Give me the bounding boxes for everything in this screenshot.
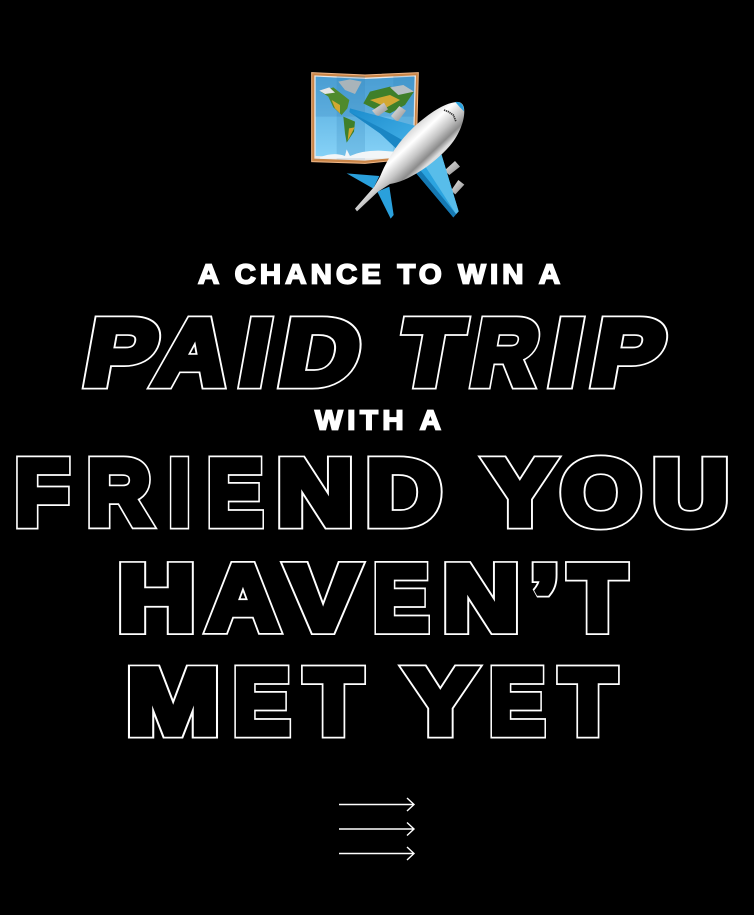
outlined heading: PAID TRIP: D [272, 300, 369, 404]
outlined heading: HAVEN'T [118, 546, 626, 650]
outlined heading: HAVEN'T: N [443, 546, 519, 650]
outlined heading: FRIEND YOU: N [277, 440, 353, 544]
icon: folded world map [312, 73, 418, 163]
outlined heading: HAVEN'T: H [118, 546, 195, 650]
outlined heading: MET YET: M [126, 650, 220, 754]
outlined heading: PAID TRIP [77, 300, 673, 404]
icon: airplane wings and tail [347, 108, 459, 219]
outlined heading: HAVEN'T: A [207, 546, 279, 650]
outlined heading: MET YET: Y [405, 650, 475, 754]
icon: three right arrows [339, 798, 414, 860]
outlined heading: PAID TRIP: I [542, 300, 590, 404]
outlined heading: MET YET: T [560, 650, 616, 754]
outlined heading: PAID TRIP: D [272, 300, 369, 404]
outlined heading: HAVEN'T: V [287, 546, 359, 650]
outlined heading: MET YET: E [233, 650, 290, 754]
outlined heading: PAID TRIP: T [391, 300, 470, 404]
outlined heading: PAID TRIP: P [77, 300, 166, 404]
heading line: A CHANCE TO WIN A: A CHANCE TO WIN A [198, 259, 560, 290]
icon: map and airplane [312, 73, 464, 219]
outlined heading: HAVEN'T: V [287, 546, 359, 650]
outlined heading: FRIEND YOU: R [87, 440, 151, 544]
outlined heading: FRIEND YOU: O [561, 440, 641, 544]
outlined heading: FRIEND YOU: R [87, 440, 151, 544]
outlined heading: PAID TRIP: I [233, 300, 279, 404]
outlined heading: HAVEN'T: ’ [530, 546, 559, 650]
outlined heading: FRIEND YOU: Y [485, 440, 554, 544]
outlined heading: PAID TRIP: R [464, 300, 547, 404]
outlined heading: MET YET: T [305, 650, 362, 754]
icon: airplane engines [372, 103, 464, 194]
outlined heading: FRIEND YOU: U [653, 440, 729, 544]
outlined heading: PAID TRIP: I [542, 300, 590, 404]
outlined heading: MET YET: E [489, 650, 545, 754]
outlined heading: HAVEN'T: ’ [530, 546, 559, 650]
outlined heading: FRIEND YOU: I [169, 440, 190, 544]
outlined heading: PAID TRIP: P [584, 300, 673, 404]
outlined heading: HAVEN'T: E [373, 546, 429, 650]
outlined heading: PAID TRIP: P [77, 300, 166, 404]
outlined heading: FRIEND YOU: N [277, 440, 353, 544]
outlined heading: MET YET: E [489, 650, 545, 754]
outlined heading: FRIEND YOU: U [653, 440, 729, 544]
outlined heading: FRIEND YOU: E [207, 440, 263, 544]
arrow 1 [339, 798, 414, 811]
arrow 3 [339, 847, 414, 860]
outlined heading: MET YET: T [305, 650, 362, 754]
outlined heading: FRIEND YOU [15, 440, 729, 544]
outlined heading: PAID TRIP: T [391, 300, 470, 404]
outlined heading: FRIEND YOU: Y [485, 440, 554, 544]
outlined heading: PAID TRIP: A [148, 300, 238, 404]
outlined heading: PAID TRIP: R [464, 300, 547, 404]
arrow 2 [339, 822, 414, 836]
outlined heading: MET YET [126, 650, 616, 754]
outlined heading: FRIEND YOU: F [15, 440, 69, 544]
outlined heading: HAVEN'T: H [118, 546, 195, 650]
outlined heading: HAVEN'T: A [207, 546, 279, 650]
outlined heading: MET YET: Y [405, 650, 475, 754]
outlined heading: FRIEND YOU: E [207, 440, 263, 544]
icon: airplane fuselage [355, 102, 464, 211]
outlined heading: MET YET: M [126, 650, 220, 754]
outlined heading: HAVEN'T: T [569, 546, 626, 650]
outlined heading: HAVEN'T: T [569, 546, 626, 650]
outlined heading: PAID TRIP: A [148, 300, 238, 404]
outlined heading: MET YET: E [233, 650, 290, 754]
outlined heading: FRIEND YOU: I [169, 440, 190, 544]
outlined heading: PAID TRIP: I [233, 300, 279, 404]
outlined heading: FRIEND YOU: O [561, 440, 641, 544]
outlined heading: HAVEN'T: N [443, 546, 519, 650]
outlined heading: FRIEND YOU: F [15, 440, 69, 544]
outlined heading: PAID TRIP: P [584, 300, 673, 404]
outlined heading: MET YET: T [560, 650, 616, 754]
outlined heading: FRIEND YOU: D [366, 440, 441, 544]
outlined heading: HAVEN'T: E [373, 546, 429, 650]
subheading line: WITH A: WITH A [315, 405, 441, 436]
outlined heading: FRIEND YOU: D [366, 440, 441, 544]
